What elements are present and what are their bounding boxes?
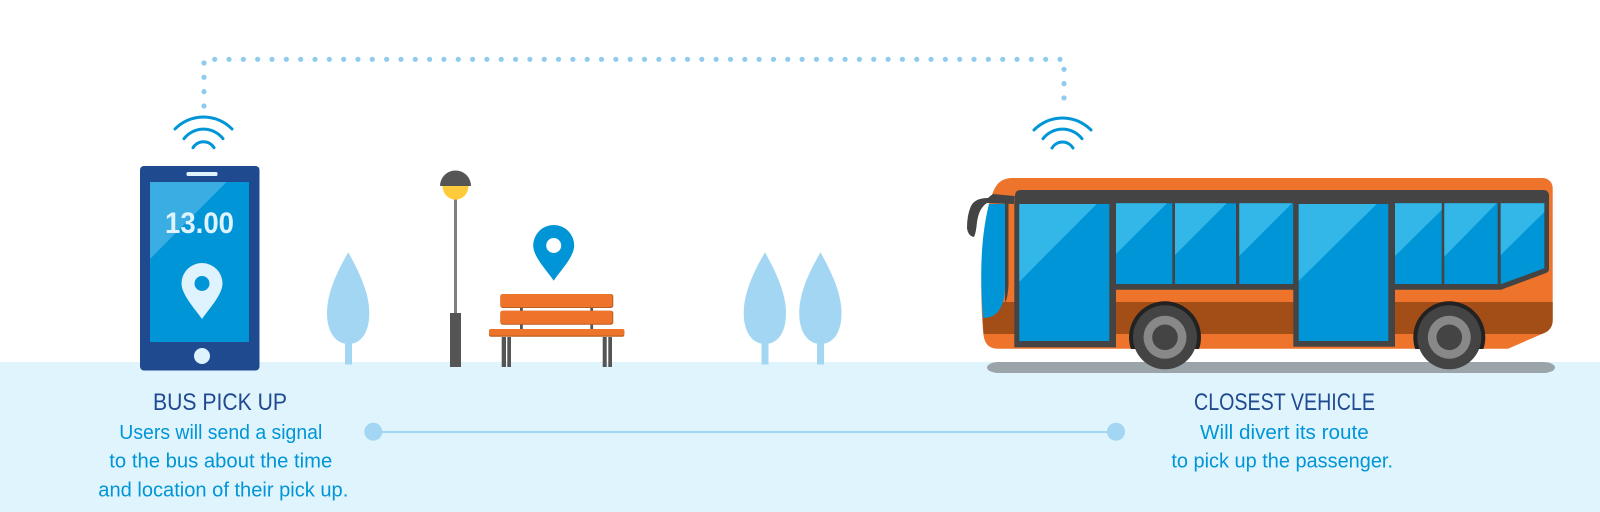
icon: tree right [799,252,842,364]
description: closest vehicle: Will divert its route [1200,422,1369,444]
heading: closest vehicle: CLOSEST VEHICLE [1194,389,1375,416]
icon: tree middle [744,252,786,364]
bus shadow [987,362,1555,373]
description: bus pick up: to the bus about the time [109,451,332,473]
bus rear wheel [1413,301,1485,373]
icon: street lamp [440,170,471,367]
icon: bench location pin [533,225,574,281]
bus windshield pillar [1005,203,1008,303]
text block: closest vehicle [1171,389,1393,473]
description: bus pick up: and location of their pick up. [98,480,348,502]
icon: bench [489,294,624,367]
bus illustration [967,178,1553,373]
text block: bus pick up [98,389,348,502]
bus lower stripe [982,302,1553,334]
heading: bus pick up: BUS PICK UP [153,389,287,416]
bus body [981,178,1553,349]
dotted signal path [204,59,1064,108]
icon: bus wifi signal [1034,118,1091,148]
connector line [364,423,1125,441]
bus windows [1116,203,1544,284]
phone time: 13.00 [165,207,234,240]
description: closest vehicle [1171,422,1393,473]
bus rear door [1293,190,1395,347]
description: bus pick up [98,422,348,502]
bus front wheel [1129,301,1201,373]
description: closest vehicle: to pick up the passenger. [1171,451,1393,473]
bus roof frame [1015,190,1549,290]
icon: smartphone [140,166,260,370]
description: bus pick up: Users will send a signal [119,422,322,444]
bus windshield [981,204,1005,318]
bus mirror [967,194,1014,237]
phone home button [194,348,210,364]
icon: phone wifi signal [175,117,232,148]
ground band [0,362,1600,512]
bus front door [1014,196,1116,347]
icon: phone location pin [182,263,222,319]
icon: tree left [327,252,369,364]
